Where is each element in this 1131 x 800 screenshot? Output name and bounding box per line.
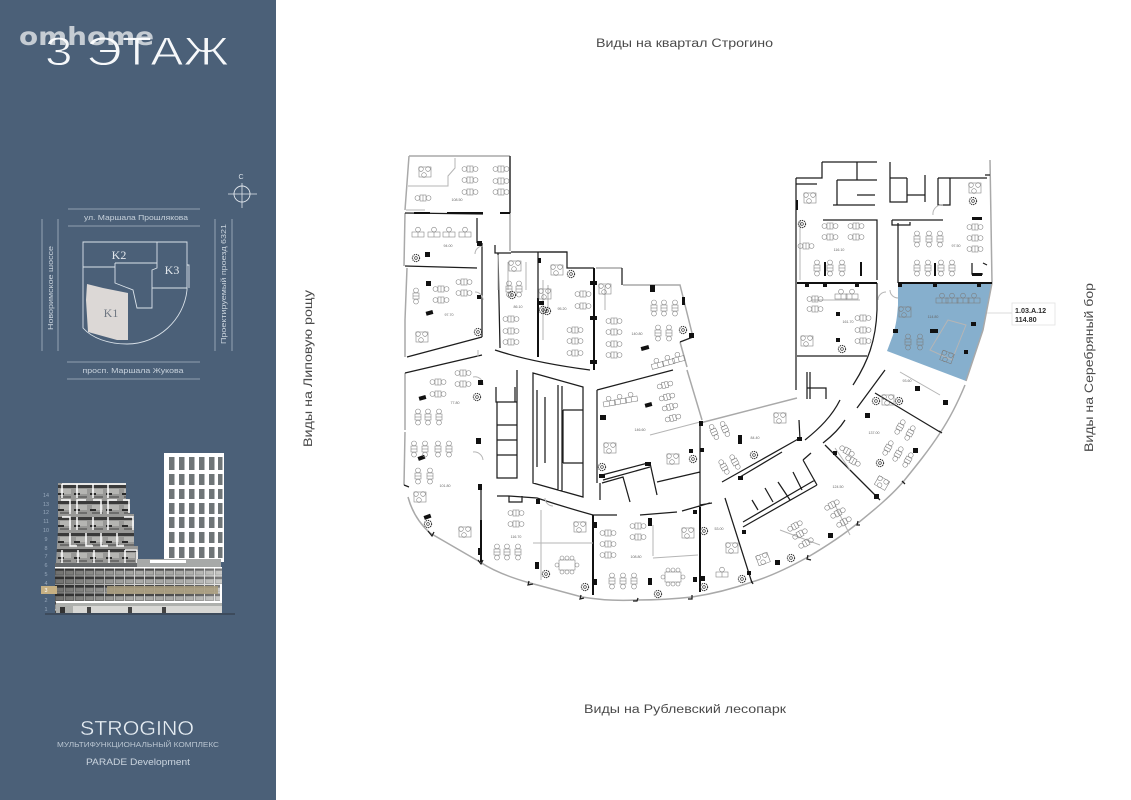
road: ул. Маршала Прошлякова: ул. Маршала Прошлякова <box>84 213 189 222</box>
road: Новоримское шоссе: Новоримское шоссе <box>46 246 55 330</box>
room area labels: 116.70 <box>511 535 521 539</box>
structural walls <box>405 156 987 595</box>
floor numbers <box>43 493 49 613</box>
floor numbers: 8 <box>44 546 48 552</box>
floor numbers: 12 <box>43 510 49 516</box>
room area labels: 97.70 <box>444 313 454 317</box>
podium <box>45 559 235 614</box>
panel: left sidebar <box>0 0 276 800</box>
current floor highlight strip <box>107 586 218 594</box>
developer: PARADE Development <box>86 757 191 767</box>
highlighted building K1 <box>86 284 128 340</box>
view label: west: Виды на Липовую рощу <box>303 290 315 447</box>
current floor marker <box>41 586 57 594</box>
label: K3: K3 <box>165 263 179 277</box>
room area labels: 108.80 <box>630 555 642 559</box>
road: просп. Маршала Жукова <box>67 362 200 379</box>
icon: compass: С <box>238 174 244 181</box>
icon: compass <box>228 174 257 208</box>
light interior partitions <box>406 158 966 580</box>
room area labels <box>440 198 960 559</box>
room area labels: 140.80 <box>632 332 642 336</box>
room area labels: 116.10 <box>834 248 844 252</box>
facade notches <box>404 175 990 601</box>
callout: unit number and area: 1.03.A.12 <box>1015 306 1046 315</box>
room area labels: 114.80 <box>928 315 938 319</box>
terraced tower K1 <box>56 483 138 563</box>
floor numbers: 7 <box>44 554 48 560</box>
room area labels: 101.80 <box>440 484 450 488</box>
floor numbers: 6 <box>44 563 48 569</box>
room area labels: 108.50 <box>452 198 462 202</box>
floor numbers: 9 <box>44 537 48 543</box>
furniture <box>411 166 983 598</box>
room area labels: 53.00 <box>714 527 724 531</box>
site map <box>42 209 232 379</box>
room area labels: 124.50 <box>832 485 844 489</box>
room area labels: 97.50 <box>952 244 960 248</box>
room area labels: 146.60 <box>634 428 646 432</box>
room area labels: 77.80 <box>450 401 460 405</box>
road: Проектируемый проезд 6321: Проектируемый проезд 6321 <box>219 224 228 344</box>
watermark: omhome: omhome <box>19 22 154 51</box>
floor numbers: 5 <box>44 572 48 578</box>
room area labels: 86.10 <box>514 305 522 309</box>
callout: unit number and area <box>987 303 1055 325</box>
floor numbers: 13 <box>43 502 49 508</box>
site outline <box>83 242 189 344</box>
floor numbers: 3 <box>44 588 48 594</box>
exterior outline <box>404 156 992 600</box>
room area labels: 84.40 <box>750 436 760 440</box>
room area labels: 95.20 <box>558 307 566 311</box>
columns <box>417 200 982 585</box>
building elevation <box>41 453 235 614</box>
road: ул. Маршала Прошлякова <box>68 209 200 226</box>
floor numbers: 14 <box>43 493 49 499</box>
room area labels: 94.00 <box>444 244 452 248</box>
label: K2: K2 <box>112 248 126 262</box>
view label: east: Виды на Серебряный бор <box>1084 283 1096 452</box>
floor numbers: 4 <box>44 581 48 587</box>
room area labels: 93.60 <box>902 379 912 383</box>
highlighted unit 1.03.A.12 <box>887 283 992 381</box>
road: Проектируемый проезд 6321 <box>215 219 232 351</box>
tower K2 <box>164 453 224 562</box>
road: просп. Маршала Жукова: просп. Маршала Жукова <box>82 366 185 375</box>
label: K1: K1 <box>104 306 118 320</box>
floor numbers: 11 <box>43 519 49 525</box>
project name: STROGINO: STROGINO <box>80 717 194 740</box>
floor numbers: 2 <box>44 598 48 604</box>
floor numbers: 1 <box>44 607 48 613</box>
callout: unit number and area: 114.80 <box>1015 315 1037 324</box>
title: 3 этаж: 3 ЭТАЖ <box>45 30 229 74</box>
thick wall segments <box>414 213 992 595</box>
road: Новоримское шоссе <box>42 219 58 351</box>
room area labels: 137.00 <box>868 431 880 435</box>
subtitle: МУЛЬТИФУНКЦИОНАЛЬНЫЙ КОМПЛЕКС <box>57 740 220 749</box>
view label: north: Виды на квартал Строгино <box>596 38 773 50</box>
room area labels: 161.70 <box>842 320 854 324</box>
floor plan <box>404 156 992 601</box>
floor numbers: 10 <box>43 528 49 534</box>
view label: south: Виды на Рублевский лесопарк <box>584 704 787 716</box>
